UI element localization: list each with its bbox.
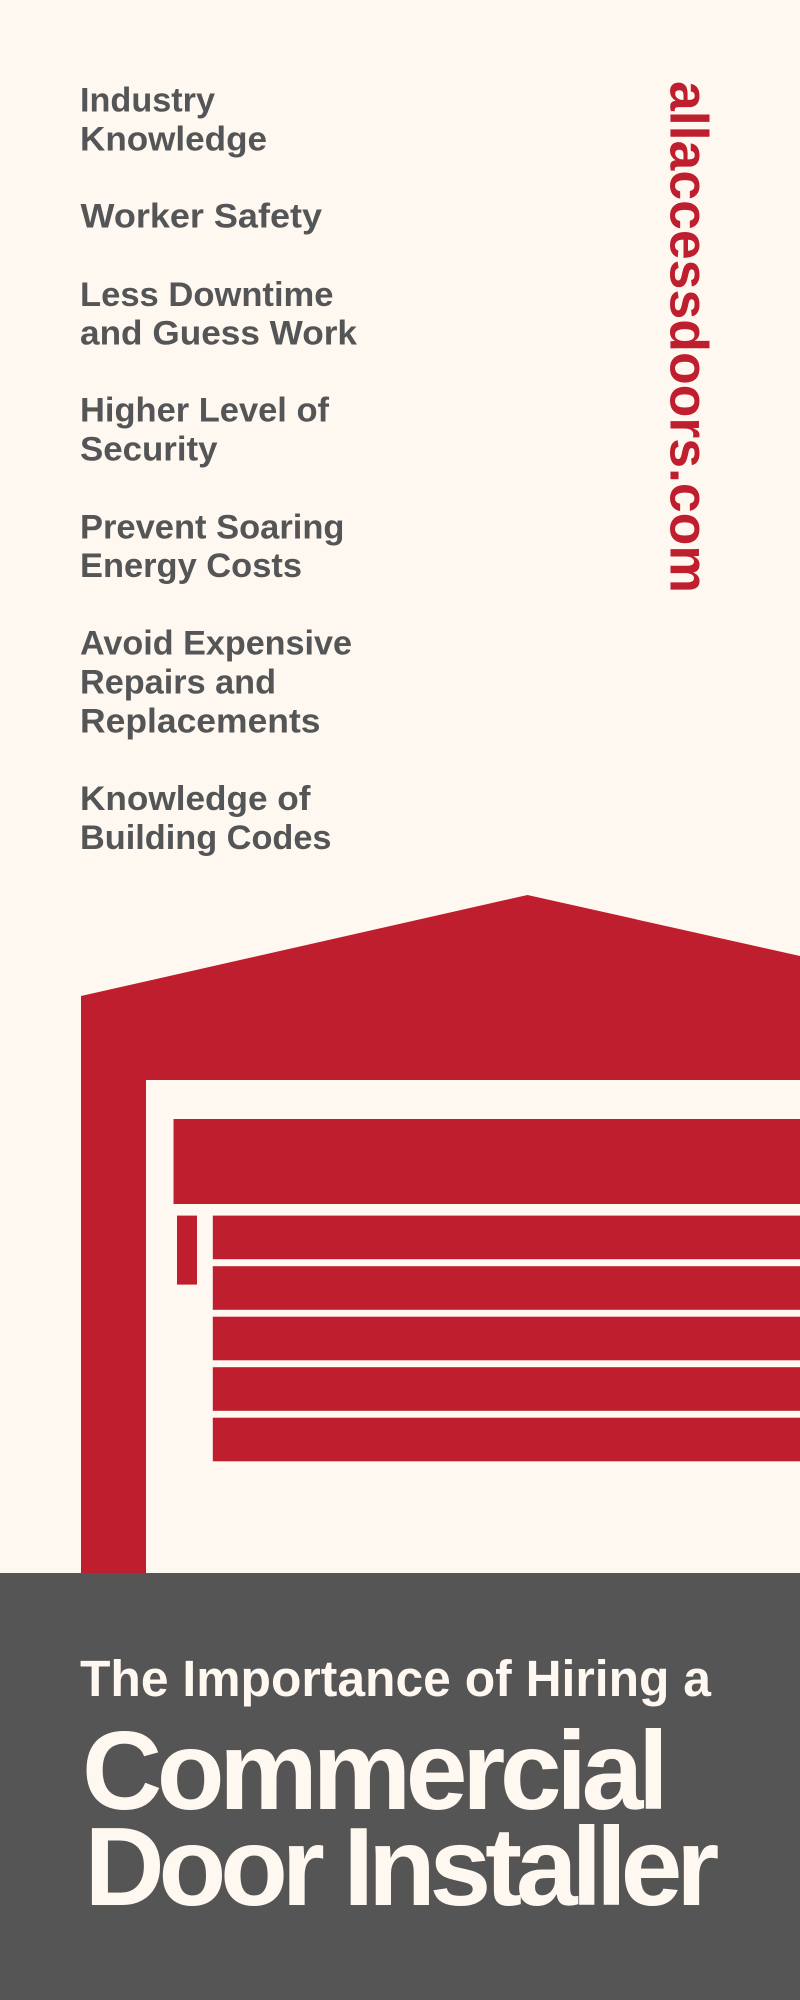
item: Higher Level of Security [80,392,330,469]
item: Less Downtime and Guess Work [80,276,357,352]
door slat 3 [213,1317,800,1360]
website url, vertical: allaccessdoors.com [659,81,719,593]
title line 2: Door Installer [84,1805,718,1929]
item: Industry Knowledge [80,82,267,159]
item: Avoid Expensive Repairs and Replacements: Repairs and [80,663,276,701]
item: Industry Knowledge: Knowledge [80,121,267,159]
door slat 5 [213,1418,800,1461]
item: Prevent Soaring Energy Costs [80,508,344,585]
door slat 1 [213,1216,800,1259]
item: Worker Safety: Worker Safety [80,198,322,236]
item: Knowledge of Building Codes: Knowledge of [80,780,311,818]
door slat 2 [213,1266,800,1310]
garage header band [174,1119,800,1204]
item: Prevent Soaring Energy Costs: Prevent Soaring [80,508,344,546]
garage outline with roof [81,895,800,1573]
item: Less Downtime and Guess Work: Less Downtime [80,276,334,314]
item: Avoid Expensive Repairs and Replacements: Avoid Expensive [80,624,352,662]
item: Knowledge of Building Codes: Building Codes [80,819,332,857]
item: Knowledge of Building Codes [80,780,332,857]
door handle bracket [177,1216,197,1285]
item: Industry Knowledge: Industry [80,82,215,120]
list of reasons [80,82,357,857]
icon: garage building [81,895,800,1573]
subtitle: The Importance of Hiring a [80,1650,712,1707]
panel background [0,1573,800,2000]
door slat 4 [213,1367,800,1411]
item: Prevent Soaring Energy Costs: Energy Costs [80,547,302,585]
item: Higher Level of Security: Security [80,431,218,469]
item: Higher Level of Security: Higher Level of [80,392,330,430]
item: Avoid Expensive Repairs and Replacements [80,624,352,741]
item: Avoid Expensive Repairs and Replacements: Replacements [80,703,320,741]
title line 1: Commercial [82,1709,663,1833]
title panel [0,1573,800,2000]
item: Less Downtime and Guess Work: and Guess Work [80,314,357,352]
